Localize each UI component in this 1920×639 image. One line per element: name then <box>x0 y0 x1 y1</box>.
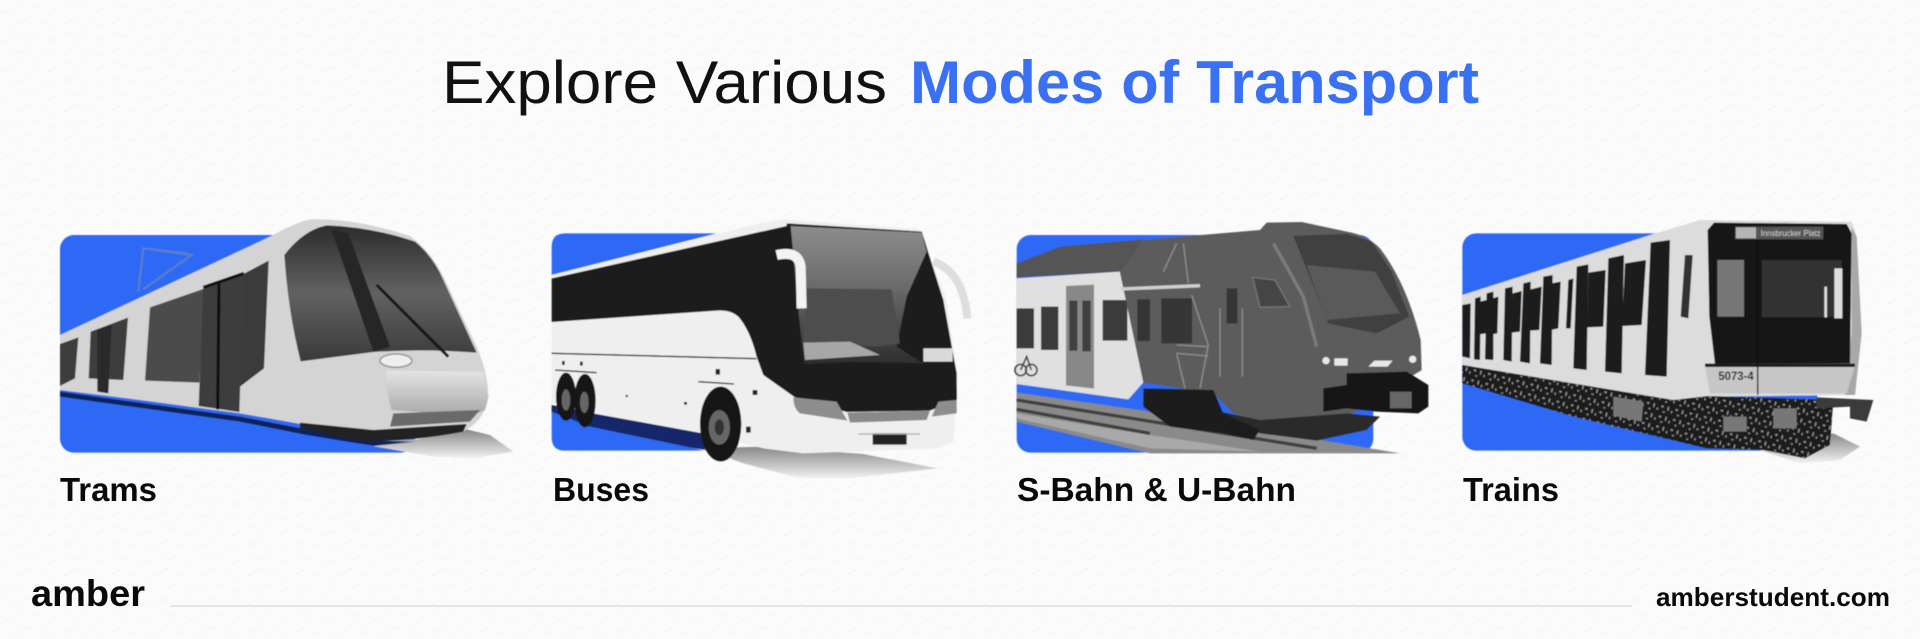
bus headlights <box>793 397 957 421</box>
tram bumper <box>386 371 488 416</box>
track <box>1017 393 1400 453</box>
windscreen <box>1293 234 1409 333</box>
windscreen reflection <box>1307 265 1400 320</box>
cab side window <box>1681 255 1693 318</box>
tram headlight <box>380 354 412 367</box>
bus bumper strip <box>847 411 930 423</box>
bicycle icon <box>1015 357 1037 376</box>
bus right mirror <box>933 262 967 318</box>
train body <box>1462 220 1862 402</box>
ballast highlight <box>1017 413 1260 452</box>
tram rear window <box>89 318 128 380</box>
tram side window <box>145 288 205 383</box>
tram door <box>199 273 244 412</box>
front bracket <box>1817 397 1873 422</box>
bus left mirror <box>777 254 802 308</box>
bus front wheel <box>700 387 741 461</box>
side cab window <box>1253 277 1290 307</box>
bus sticker <box>923 348 953 362</box>
bus plate rail <box>858 432 920 436</box>
undercarriage detail <box>1462 365 1833 458</box>
tram grille <box>390 410 480 427</box>
rear car windows <box>1017 300 1127 350</box>
label: s-bahn and u-bahn: S-Bahn & U-Bahn <box>1017 471 1296 508</box>
bus rear wheels <box>556 373 596 427</box>
label: buses: Buses <box>553 471 649 508</box>
panel: trams <box>60 219 513 458</box>
bogie <box>1143 388 1260 440</box>
footer url: amberstudent.com <box>1656 582 1890 612</box>
bus plate <box>873 433 907 445</box>
footer rule <box>170 605 1632 607</box>
undercarriage <box>1462 365 1833 458</box>
undercarriage boxes <box>1613 397 1797 432</box>
rear car door <box>1066 285 1094 389</box>
windscreen pane <box>1762 260 1842 317</box>
front undercarriage <box>1220 412 1380 441</box>
front lower panel <box>1705 366 1855 393</box>
unit number: 5073-4 <box>1718 369 1754 383</box>
bus ground shadow <box>703 447 937 479</box>
destination sign: Innsbrucker Platz <box>1761 228 1821 238</box>
blue card <box>1017 235 1373 453</box>
tram under shadow <box>60 392 415 446</box>
panel: buses <box>552 219 967 479</box>
headlights <box>1322 356 1416 367</box>
bus shadow on card <box>552 405 710 451</box>
rear car roof <box>1017 239 1143 277</box>
doors and windows <box>1462 240 1670 377</box>
tram wiper <box>377 285 448 357</box>
bus body line <box>552 353 757 384</box>
roof strip <box>1120 284 1200 291</box>
title <box>442 49 1479 116</box>
pane bright strips <box>1824 268 1842 318</box>
title: Modes of Transport <box>910 49 1479 116</box>
icon: pantograph <box>138 248 192 292</box>
panel: trains <box>1462 220 1873 463</box>
title: Explore Various <box>442 49 887 116</box>
blue card <box>1462 233 1817 451</box>
train windscreen <box>1708 223 1852 364</box>
tram door frame <box>203 273 244 409</box>
side pane <box>1717 260 1744 317</box>
front car body <box>1120 222 1422 422</box>
door lines <box>1163 243 1242 388</box>
bus hatch marks <box>562 361 757 433</box>
tram window front <box>240 261 269 387</box>
destination sign <box>1735 227 1823 239</box>
bus body <box>552 219 957 453</box>
centre divider <box>1756 240 1760 395</box>
label: trains: Trains <box>1463 471 1559 508</box>
tram rear door <box>97 325 112 393</box>
tram pillar <box>332 230 390 352</box>
blue card <box>60 235 415 453</box>
rail <box>1017 400 1317 448</box>
bus dashboard <box>803 342 880 360</box>
coupler and bumper <box>1323 372 1428 413</box>
panel: s-bahn and u-bahn <box>1015 222 1428 453</box>
front car windows <box>1137 288 1237 343</box>
rear car side <box>1017 272 1144 399</box>
cab shoulder highlight <box>1273 243 1317 347</box>
bus windshield lower <box>803 288 900 347</box>
coupler face <box>1390 392 1412 408</box>
footer logo: amber <box>31 573 145 614</box>
bus roof band <box>552 223 957 412</box>
blue card <box>552 233 717 451</box>
train shadow <box>1760 433 1860 463</box>
label: trams: Trams <box>60 471 157 508</box>
tram windshield <box>284 225 477 361</box>
tram far window <box>60 337 78 386</box>
tram track shadow <box>353 429 513 458</box>
front rail <box>1705 360 1855 370</box>
bus windshield <box>791 226 927 364</box>
tram dark skirt <box>300 423 467 441</box>
front right side shade <box>1845 227 1862 395</box>
rear door glass <box>1069 301 1091 351</box>
tram body <box>60 219 488 436</box>
